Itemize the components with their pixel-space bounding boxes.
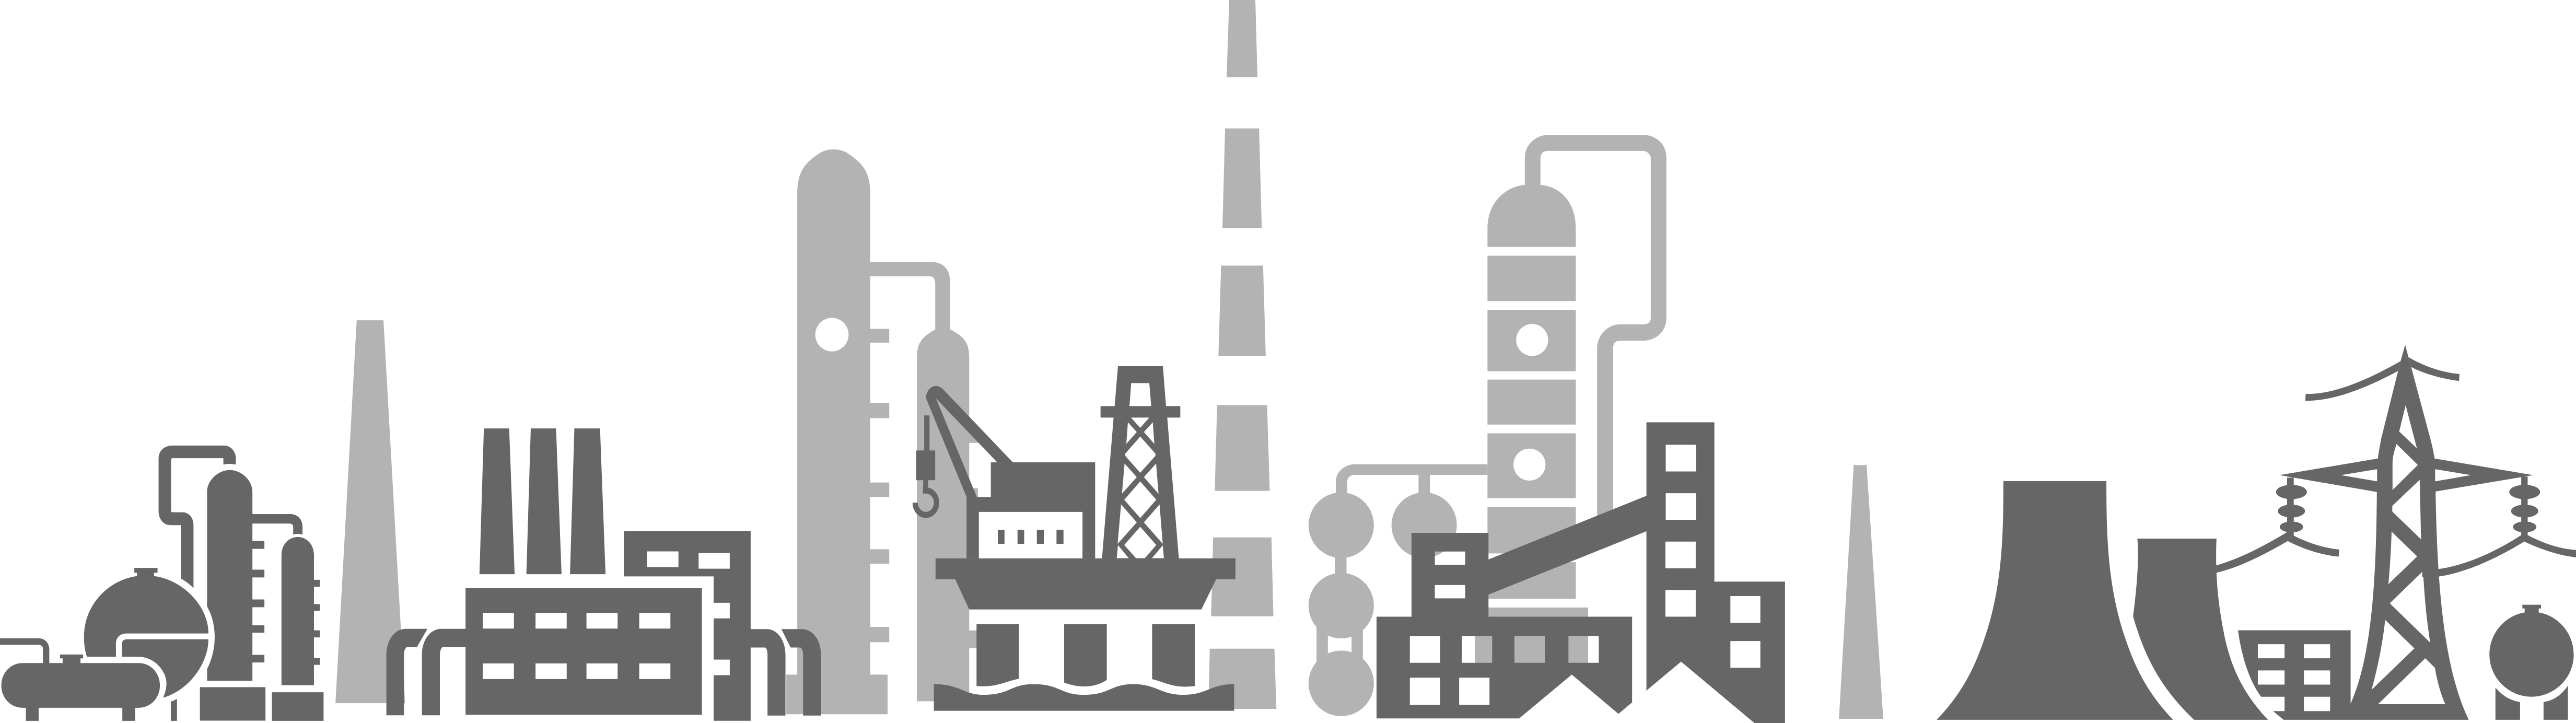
water waves	[934, 684, 1234, 711]
offshore platform	[915, 386, 1235, 711]
overhead pipe loop	[159, 446, 236, 588]
left bent pipe	[387, 629, 427, 715]
background chimney: left	[335, 320, 405, 703]
background distillation column: short	[917, 328, 978, 701]
column bases	[200, 687, 323, 721]
platform deck and hull	[936, 558, 1235, 610]
background segmented column with overhead pipe	[1475, 135, 1666, 667]
crane hook	[915, 415, 937, 515]
spherical tank	[84, 568, 208, 657]
top wires	[2305, 357, 2460, 401]
right bent pipe	[782, 629, 821, 716]
three smokestacks	[480, 428, 605, 574]
pontoons	[976, 624, 1195, 686]
background chimney: right	[1839, 465, 1883, 719]
background segmented chimney	[1208, 0, 1276, 709]
pylon tower and attached building	[2238, 345, 2533, 720]
buildings with conveyor	[1377, 422, 1785, 723]
tank legs	[2496, 685, 2568, 720]
short column	[282, 537, 320, 685]
side building	[624, 531, 786, 721]
cooling towers	[1937, 481, 2268, 720]
drilling derrick	[1101, 366, 1180, 559]
deckhouse windows	[998, 530, 1064, 544]
main factory hall with windows	[422, 588, 702, 715]
refinery: pipes and columns at left	[0, 446, 323, 721]
tall column	[207, 470, 302, 681]
power pylon with small building and tank	[2216, 345, 2576, 720]
cooling tower: large	[1937, 481, 2173, 720]
tank leg	[171, 699, 177, 721]
spherical tank lower section	[122, 639, 208, 698]
background distillation column: tall	[786, 149, 950, 714]
factory with stacks and pipes	[387, 428, 821, 721]
background spherical vessels with connecting pipes	[1309, 464, 1487, 716]
horizontal tank with feed pipe	[0, 638, 160, 721]
cooling tower: small	[2133, 539, 2268, 720]
right insulator and wires	[2438, 476, 2576, 577]
crane and deckhouse	[926, 386, 1095, 558]
spherical tank at right	[2489, 605, 2574, 697]
left insulator and wires	[2216, 477, 2339, 573]
